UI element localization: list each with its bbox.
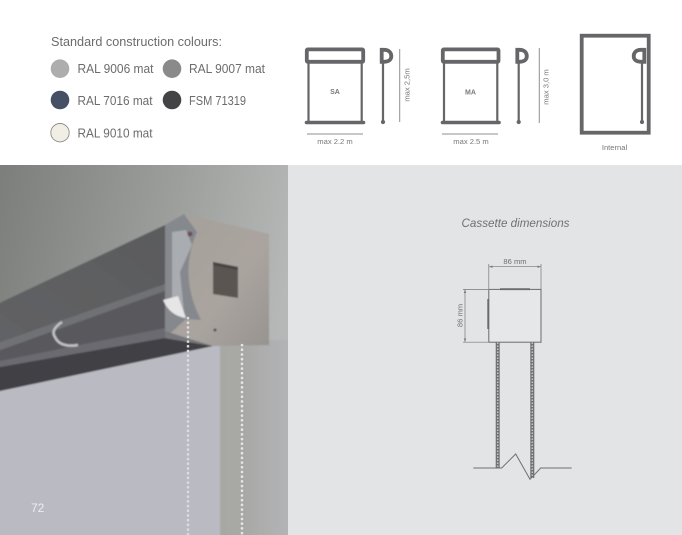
panel: colour swatches (51, 35, 265, 142)
dimension: 86 mm height (456, 289, 488, 342)
swatch: RAL 9010 mat (51, 124, 153, 142)
swatch: RAL 9007 mat (163, 59, 265, 78)
dimension: 86 mm width: 86 mm (503, 257, 527, 266)
diagram: internal blind: Internal (602, 143, 627, 152)
diagram: cassette end section (488, 289, 541, 342)
diagram: SA blind: max 2,5m (402, 68, 412, 102)
swatch: RAL 9010 mat: RAL 9010 mat (78, 127, 153, 141)
swatch: RAL 9006 mat: RAL 9006 mat (78, 62, 154, 76)
heading: standard construction colours: Standard construction colours: (51, 35, 222, 49)
diagram: right bead chain (530, 342, 534, 478)
swatch: FSM 71319 (163, 91, 246, 109)
swatch: RAL 7016 mat (51, 91, 153, 109)
dimension: 86 mm width (489, 257, 541, 289)
swatch: RAL 9007 mat: RAL 9007 mat (189, 62, 265, 76)
swatch: RAL 7016 mat: RAL 7016 mat (78, 94, 153, 108)
diagram: MA blind: max 2.5 m (453, 137, 489, 146)
swatch: FSM 71319: FSM 71319 (189, 94, 246, 108)
dimension: 86 mm height: 86 mm (456, 304, 464, 327)
diagram: break line (473, 454, 572, 479)
diagram: left bead chain (496, 342, 500, 468)
diagram: SA blind: max 2.2 m (317, 137, 353, 146)
diagram: internal blind (582, 36, 649, 152)
diagram: MA blind: max 3,0 m (542, 69, 550, 105)
page number: 72 (31, 501, 45, 515)
bead chains in photo (188, 318, 242, 535)
panel: cassette dimensions (288, 165, 682, 535)
diagram: MA blind (442, 48, 550, 146)
heading: cassette dimensions: Cassette dimensions (462, 216, 570, 230)
diagram: SA blind (306, 49, 412, 146)
diagram: SA blind: SA (330, 89, 340, 96)
panel: product photo of cassette (0, 160, 293, 535)
diagram: MA blind: MA (465, 90, 476, 96)
swatch: RAL 9006 mat (51, 59, 154, 78)
